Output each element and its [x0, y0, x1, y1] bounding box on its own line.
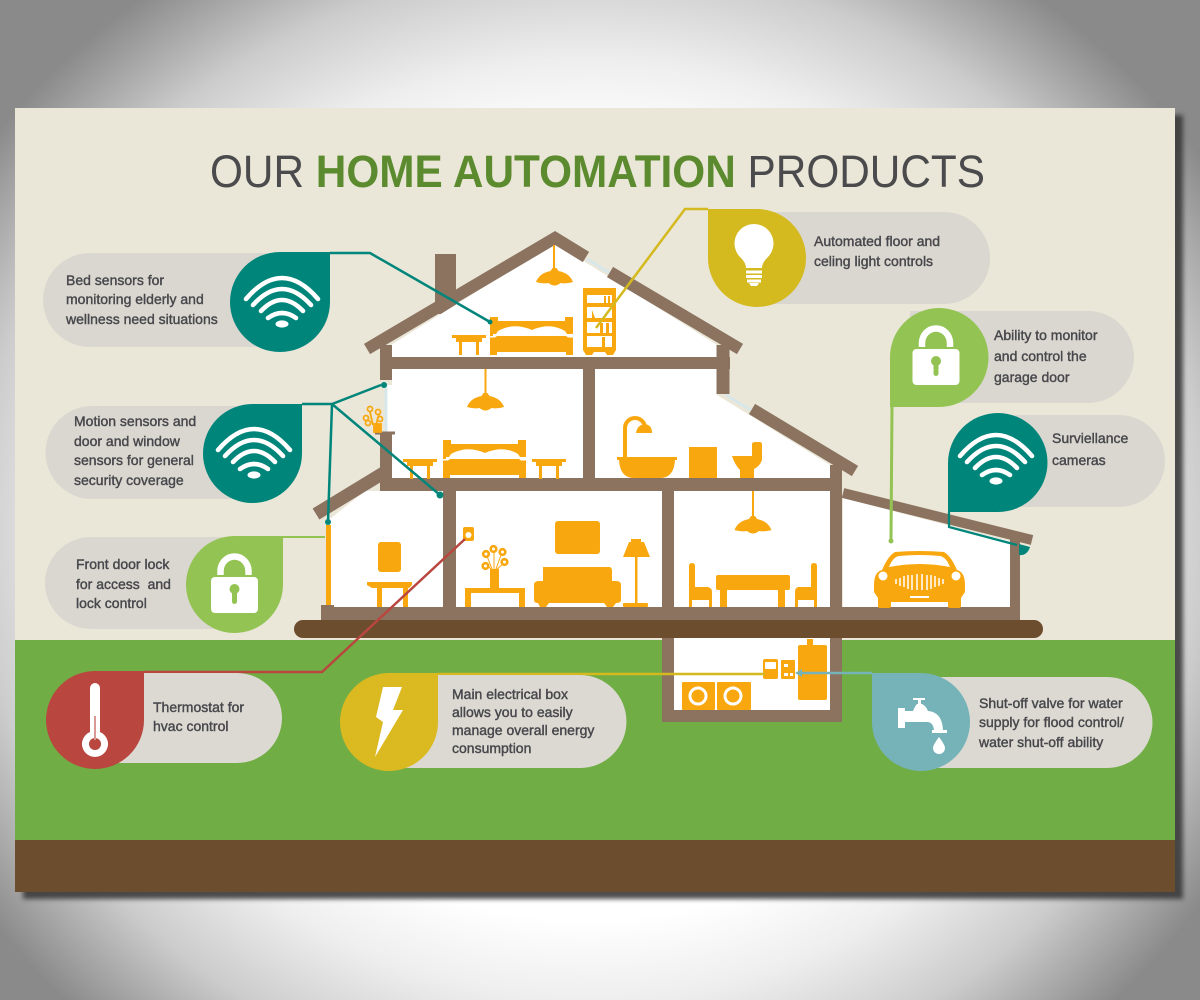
callout: electrical box: Main electrical box [452, 686, 568, 702]
soil [15, 840, 1175, 892]
callout: bed sensors [43, 252, 330, 352]
foundation [294, 620, 1043, 638]
lawn [15, 640, 1175, 840]
callout: water shut-off valve: Shut-off valve for water [979, 695, 1123, 711]
callout: thermostat: Thermostat for [153, 699, 244, 715]
callout: lighting: Automated floor and [814, 233, 940, 249]
front room furniture [367, 542, 412, 607]
callout: front door lock: lock control [76, 595, 147, 611]
callout: surveillance cameras: Surviellance [1052, 430, 1128, 446]
callout: motion sensors: Motion sensors and [74, 413, 196, 429]
callout: thermostat [46, 671, 282, 769]
callout: motion sensors: sensors for general [74, 452, 194, 468]
callout: electrical box: consumption [452, 740, 531, 756]
callout: motion sensors: door and window [74, 433, 181, 449]
callout: front door lock: Front door lock [76, 556, 170, 572]
callout: electrical box: manage overall energy [452, 722, 594, 738]
connector: motion sensors [302, 382, 444, 525]
callout: surveillance cameras: cameras [1052, 452, 1106, 468]
house interior [330, 243, 1012, 610]
connector: water valve [795, 669, 872, 677]
second-floor bedroom furniture [403, 369, 566, 479]
callout: garage door: and control the [994, 348, 1087, 364]
callout: water shut-off valve [872, 673, 1153, 771]
connector: lights [596, 209, 708, 328]
bookshelf [583, 288, 616, 355]
callout: garage door [890, 308, 1134, 407]
connector: thermostat [144, 539, 465, 672]
callout: garage door: Ability to monitor [994, 327, 1098, 343]
callout: thermostat: hvac control [153, 718, 228, 734]
basement appliances [682, 639, 827, 710]
connector: garage door [888, 405, 894, 544]
callout: bed sensors: Bed sensors for [66, 272, 164, 288]
connector: electrical box [438, 673, 765, 675]
bathroom fixtures [617, 418, 762, 478]
callout: garage door: garage door [994, 369, 1070, 385]
connector: front door [283, 536, 325, 538]
chimney [435, 254, 456, 314]
car [874, 551, 965, 608]
callout: water shut-off valve: water shut-off ability [978, 734, 1103, 750]
dining room furniture [689, 491, 817, 607]
callout: front door lock: for access and [76, 576, 171, 592]
card shadow [23, 115, 1183, 899]
attic furniture [452, 245, 616, 355]
basement interior [670, 636, 835, 714]
callout: front door lock [45, 536, 283, 633]
house cross-section [294, 238, 1043, 716]
callout: motion sensors: security coverage [74, 472, 184, 488]
connector: bed sensors [330, 253, 492, 324]
callout: bed sensors: wellness need situations [65, 311, 218, 327]
thermostat [463, 527, 474, 541]
front porch post [326, 525, 331, 606]
callout: motion sensors [46, 404, 302, 503]
title: OUR HOME AUTOMATION PRODUCTS [210, 146, 985, 197]
callout: lighting [708, 209, 990, 307]
connector: surveillance [949, 512, 1030, 555]
callout: surveillance cameras [948, 413, 1165, 512]
callout: electrical box [340, 673, 626, 771]
card background [15, 108, 1175, 892]
house structure [316, 238, 1032, 716]
callout: electrical box: allows you to easily [452, 704, 573, 720]
callout: bed sensors: monitoring elderly and [66, 291, 204, 307]
plant on window sill [364, 406, 382, 432]
callout: water shut-off valve: supply for flood control/ [979, 714, 1124, 730]
callout: lighting: celing light controls [814, 253, 933, 269]
windows [386, 259, 751, 432]
living room furniture [465, 521, 650, 607]
